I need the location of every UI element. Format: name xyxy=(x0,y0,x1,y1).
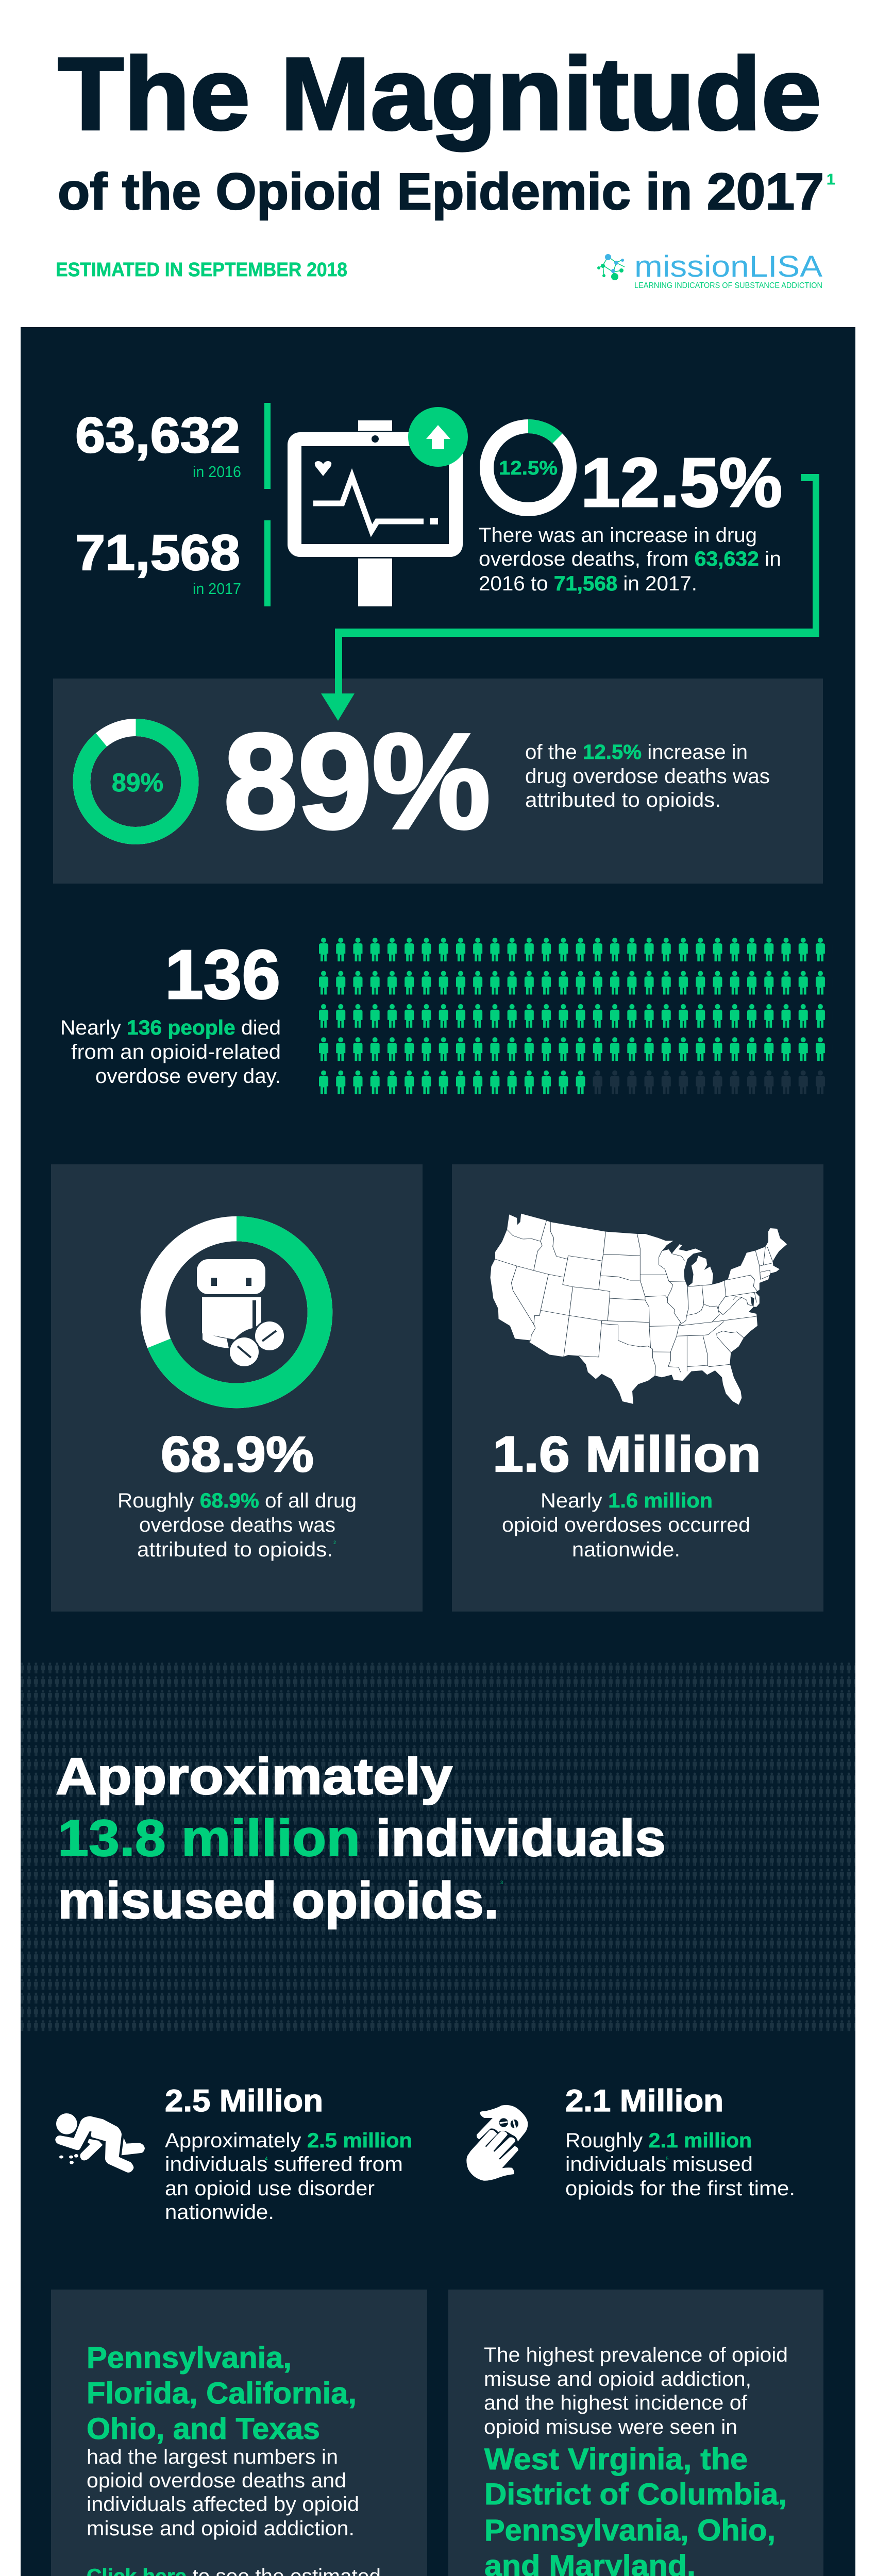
stat: 63,632 in 2016 xyxy=(75,403,271,489)
donut chart: 89%: 89% xyxy=(112,768,163,797)
text: increase in overdose deaths: There was an increase in drug xyxy=(479,524,757,547)
text: Pennsylvania, Florida, California, Ohio, and Texas xyxy=(87,2341,357,2446)
text: West Virginia, DC, Pennsylvania, Ohio, Maryland: Pennsylvania, Ohio, xyxy=(484,2514,776,2547)
donut chart: 89% xyxy=(81,727,190,836)
text: highest prevalence description: misuse and opioid addiction, xyxy=(484,2368,751,2391)
text: increase in overdose deaths: overdose deaths, from 63,632 in xyxy=(479,548,781,570)
title xyxy=(58,37,835,221)
stat: 71,568 in 2017: 71,568 xyxy=(75,524,240,581)
stat: 2.1 million: individuals misused xyxy=(565,2153,753,2176)
big figure: 89%: 89% xyxy=(224,705,491,857)
title: 1 xyxy=(827,171,835,188)
stat: 2.1 million: 2.1 Million xyxy=(565,2083,723,2118)
heading: 13.8 million individuals misused opioids: Approximately xyxy=(56,1748,452,1805)
text: increase in overdose deaths: 2016 to 71,568 in 2017. xyxy=(479,572,697,595)
stat: 136 people per day: from an opioid-related xyxy=(71,1041,281,1063)
text: 68.9% description: 2 xyxy=(333,1540,336,1545)
icon: hand with pills xyxy=(466,2105,528,2181)
icon: collapsed person xyxy=(55,2113,145,2173)
text: 1.6 million description: nationwide. xyxy=(572,1538,680,1561)
text: 89% description: of the 12.5% increase in xyxy=(525,741,748,764)
estimate date: ESTIMATED IN SEPTEMBER 2018 xyxy=(56,259,347,281)
stat: 2.5 million: 2.5 Million xyxy=(165,2083,323,2118)
heading: 13.8 million individuals misused opioids: 3 xyxy=(500,1880,503,1885)
text: Pennsylvania, Florida, California, Ohio, and Texas: Ohio, and Texas xyxy=(87,2412,320,2446)
stat: 2.1 million xyxy=(565,2083,795,2200)
logo: Mission LISA xyxy=(597,250,822,290)
background pattern: people xyxy=(21,1663,855,2032)
stat: 2.5 million: 4 xyxy=(265,2156,268,2162)
icon: pill bottle xyxy=(197,1259,285,1368)
text: largest numbers description xyxy=(87,2446,359,2540)
heading: 13.8 million individuals misused opioids: misused opioids. xyxy=(58,1872,499,1929)
stat: 2.1 million: opioids for the first time. xyxy=(565,2177,795,2200)
stat: 136 people per day: Nearly 136 people died xyxy=(60,1016,281,1039)
stat: 136 people per day: overdose every day. xyxy=(95,1065,281,1088)
text: highest prevalence description xyxy=(484,2344,788,2438)
heading: 13.8 million individuals misused opioids: 13.8 million individuals xyxy=(58,1809,666,1867)
stat: 63,632 in 2016: 63,632 xyxy=(75,407,240,463)
stat: 63,632 in 2016: in 2016 xyxy=(193,463,241,481)
panel: states with largest numbers xyxy=(51,2290,427,2576)
text: increase in overdose deaths xyxy=(479,524,781,595)
text: largest numbers description: opioid overdose deaths and xyxy=(87,2469,346,2492)
donut chart: 68.9% xyxy=(153,1229,320,1396)
donut chart: 12.5% xyxy=(486,427,570,509)
stat: 71,568 in 2017 xyxy=(75,520,271,606)
icon: US map xyxy=(490,1214,787,1405)
text: West Virginia, DC, Pennsylvania, Ohio, Maryland xyxy=(484,2443,787,2576)
panel: states with highest prevalence xyxy=(448,2290,823,2576)
panel: 68.9% of drug overdose deaths xyxy=(51,1164,423,1612)
text: largest numbers description: misuse and opioid addiction. xyxy=(87,2517,355,2540)
text: Pennsylvania, Florida, California, Ohio, and Texas: Florida, California, xyxy=(87,2377,357,2410)
title: of the Opioid Epidemic in 2017 xyxy=(58,163,824,221)
panel: 89 percent attributed to opioids xyxy=(53,679,823,884)
stat: 2.5 million: individuals suffered from xyxy=(165,2153,403,2176)
stat: 136 people per day: 136 xyxy=(165,936,280,1013)
arrow: from 12.5% to 89% xyxy=(321,474,819,721)
text: 89% description xyxy=(525,741,770,811)
text: highest prevalence description: opioid misuse were seen in xyxy=(484,2416,737,2438)
big figure: 12.5%: 12.5% xyxy=(581,444,782,521)
stat: 136 people per day xyxy=(60,936,281,1088)
text: highest prevalence description: The highest prevalence of opioid xyxy=(484,2344,788,2366)
logo: Mission LISA: missionLISA xyxy=(634,250,822,283)
stat: 2.1 million: Roughly 2.1 million xyxy=(565,2129,752,2152)
pictogram: 136 people xyxy=(319,938,833,1104)
stat: 2.5 million: Approximately 2.5 million xyxy=(165,2129,412,2152)
text: 1.6 million description: Nearly 1.6 million xyxy=(541,1489,713,1512)
text: 1.6 million description: opioid overdoses occurred xyxy=(502,1514,750,1536)
big figure: 68.9%: 68.9% xyxy=(161,1426,314,1482)
text: West Virginia, DC, Pennsylvania, Ohio, Maryland: District of Columbia, xyxy=(484,2478,787,2511)
text: largest numbers description: had the largest numbers in xyxy=(87,2446,338,2468)
panel: 1.6 million overdoses xyxy=(452,1164,823,1612)
heading: 13.8 million individuals misused opioids xyxy=(56,1748,666,1929)
big figure: 1.6 Million: 1.6 Million xyxy=(493,1426,761,1482)
text: 68.9% description: Roughly 68.9% of all drug xyxy=(117,1489,357,1512)
text: 89% description: drug overdose deaths was xyxy=(525,765,770,788)
text: 1.6 million description xyxy=(502,1489,750,1561)
text: 68.9% description xyxy=(117,1489,357,1561)
title: The Magnitude xyxy=(58,37,821,151)
text: Pennsylvania, Florida, California, Ohio, and Texas: Pennsylvania, xyxy=(87,2341,292,2375)
text: 89% description: attributed to opioids. xyxy=(525,789,721,811)
stat: 2.1 million: 5 xyxy=(666,2156,669,2162)
text: 68.9% description: overdose deaths was xyxy=(139,1514,335,1536)
text: West Virginia, DC, Pennsylvania, Ohio, Maryland: West Virginia, the xyxy=(484,2443,748,2476)
stat: 2.5 million: nationwide. xyxy=(165,2201,274,2224)
donut chart: 12.5%: 12.5% xyxy=(499,457,558,479)
text: largest numbers description: individuals affected by opioid xyxy=(87,2493,359,2516)
icon: heart monitor with up arrow xyxy=(288,407,468,606)
stat: 2.5 million xyxy=(165,2083,412,2224)
stat: 2.5 million: an opioid use disorder xyxy=(165,2177,375,2200)
logo: Mission LISA: LEARNING INDICATORS OF SUBSTANCE ADDICTION xyxy=(634,281,822,290)
text: 68.9% description: attributed to opioids. xyxy=(137,1538,333,1561)
text: highest prevalence description: and the highest incidence of xyxy=(484,2392,748,2414)
stat: 71,568 in 2017: in 2017 xyxy=(193,580,241,598)
